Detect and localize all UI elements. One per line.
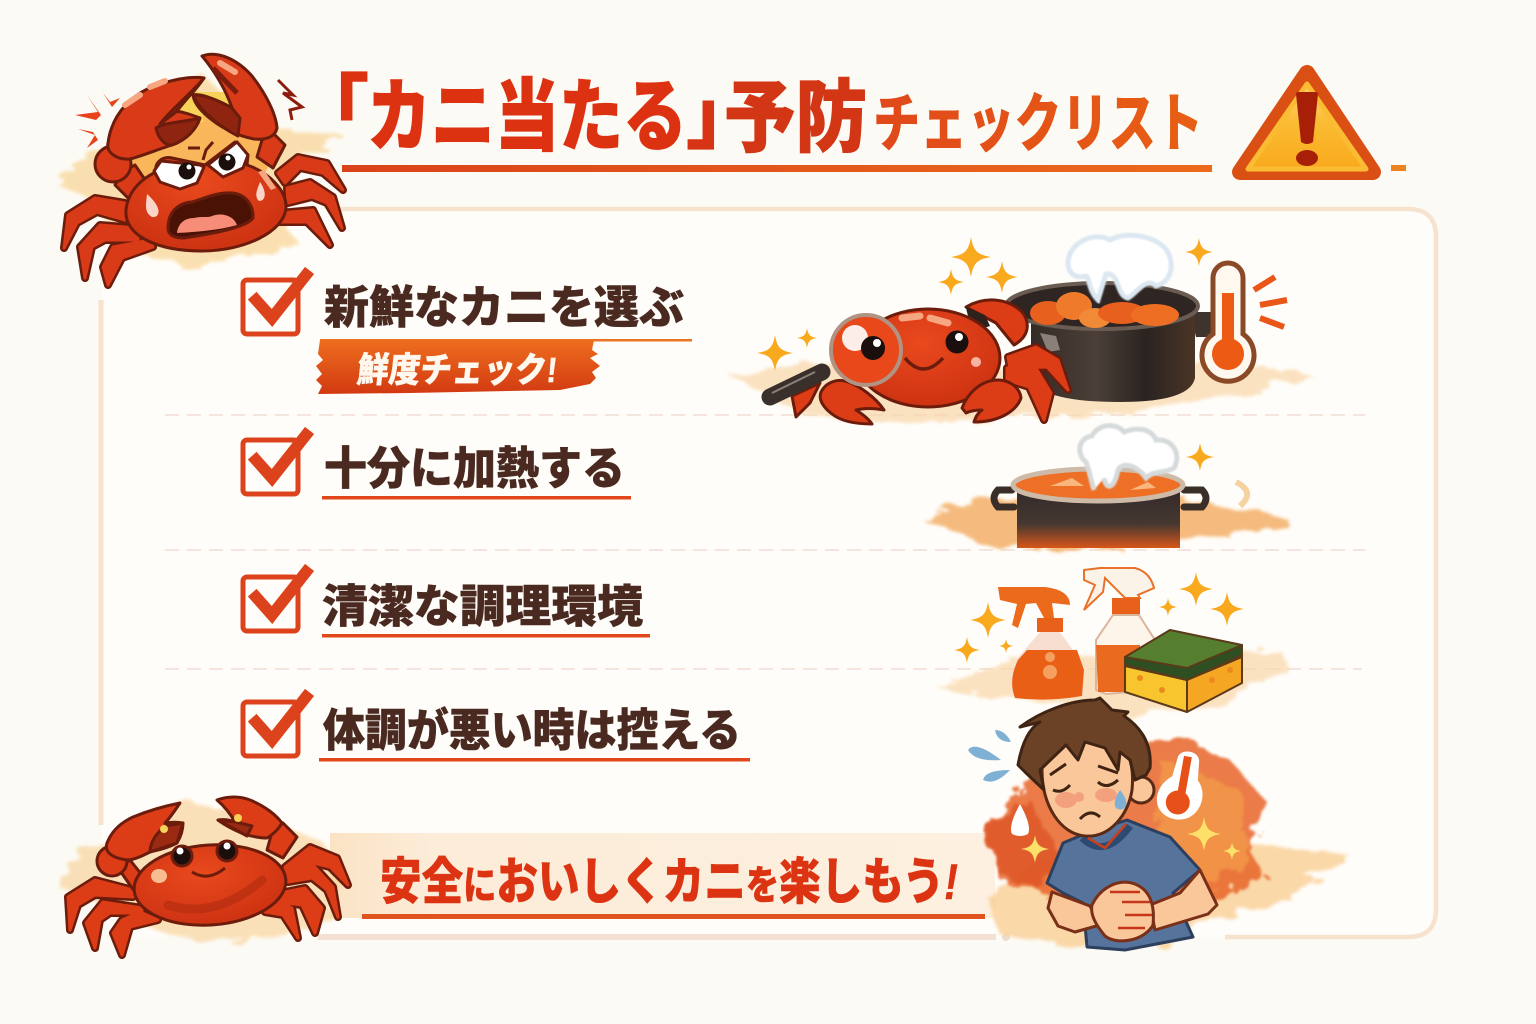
crab shell	[131, 840, 289, 930]
ears	[1128, 777, 1154, 803]
crab body	[856, 309, 1000, 407]
title: 「	[293, 69, 369, 154]
pot food	[1030, 292, 1179, 328]
title: チェックリスト	[873, 88, 1203, 160]
crab smile	[905, 358, 943, 369]
pot handles	[994, 490, 1206, 507]
row 3 underline	[322, 634, 650, 638]
face	[1042, 729, 1133, 836]
row 4 label: 体調が悪い時は控える	[323, 705, 741, 756]
crab claws	[108, 77, 204, 159]
crab claws	[106, 803, 183, 860]
pot rim	[1006, 283, 1198, 329]
checkbox 4	[243, 697, 306, 756]
pot rim	[1013, 469, 1183, 501]
crab cheek	[971, 357, 981, 367]
spray bottle white	[1084, 568, 1155, 694]
checkbox 3	[243, 572, 306, 631]
face backdrop	[118, 105, 280, 200]
crab eye	[946, 330, 968, 354]
band background	[330, 833, 995, 918]
row 3: clean kitchen	[243, 572, 650, 638]
steam	[1080, 426, 1177, 490]
icon: warning triangle	[1240, 73, 1373, 172]
title underline	[342, 165, 1212, 172]
arms and hands	[1048, 870, 1217, 941]
wash: bottom crab	[58, 800, 345, 945]
row 1: choose fresh crab	[243, 275, 692, 394]
crab arms	[97, 823, 297, 892]
panel: checklist card	[101, 209, 1436, 941]
sparkles	[954, 572, 1244, 663]
crab shell	[126, 142, 286, 251]
neck	[1088, 824, 1126, 848]
tear	[1115, 790, 1126, 810]
pot highlight	[1040, 333, 1060, 352]
crab tail	[792, 383, 820, 417]
title: 」	[686, 74, 762, 159]
title	[293, 69, 1203, 162]
sparkles: boy	[1021, 817, 1241, 863]
sparkle	[1186, 443, 1214, 471]
heat wisp	[1236, 482, 1247, 506]
crab highlight	[151, 869, 167, 883]
illustration: steam over first pot	[1068, 235, 1171, 300]
cheeks	[1055, 788, 1117, 808]
row 4 underline	[319, 758, 750, 762]
icon: fever thermometer	[1154, 748, 1210, 823]
sponge	[1125, 630, 1242, 712]
shirt	[1047, 820, 1200, 950]
icon: magnifying glass	[770, 315, 901, 397]
crab smile	[192, 868, 225, 876]
wash: cleaning supplies	[932, 650, 1290, 716]
icon: angry crab	[64, 54, 343, 285]
sweat drops	[146, 170, 276, 217]
shell highlights	[902, 316, 948, 323]
crab shell speckle	[168, 880, 262, 909]
icon: white drop	[1011, 804, 1029, 836]
illustration: boiling pot	[994, 426, 1247, 548]
row 2: cook thoroughly	[243, 435, 631, 500]
icon: blue sweat drops	[968, 730, 1011, 782]
closing message band	[330, 833, 995, 919]
icon: thermometer	[1202, 263, 1287, 381]
crab arms	[95, 133, 285, 200]
illustration: cleaning supplies	[954, 568, 1244, 712]
title: カニ当たる	[367, 72, 687, 161]
checkbox 1	[243, 275, 306, 334]
row 3 label: 清潔な調理環境	[322, 581, 643, 632]
icon: anger marks	[75, 80, 302, 148]
crab legs	[64, 157, 343, 285]
wash: boy background	[985, 735, 1350, 945]
illustration: sick boy	[1018, 698, 1217, 950]
row 2 label: 十分に加熱する	[324, 443, 625, 494]
icon: happy crab	[68, 797, 348, 955]
hair	[1018, 698, 1150, 790]
row 1 label: 新鮮なカニを選ぶ	[324, 282, 684, 333]
row 4: avoid when unwell	[243, 697, 750, 762]
crab eyes	[154, 142, 248, 189]
wash: crab and pot	[728, 360, 1316, 424]
pot body	[1031, 308, 1195, 402]
crab mouth	[168, 193, 253, 238]
sparkles: first illustration	[757, 237, 1213, 371]
watercolor wash: top crab	[55, 72, 345, 268]
band underline	[362, 914, 985, 919]
title: 予防	[724, 73, 867, 162]
row 1 underline	[320, 339, 692, 342]
wash: boiling pot	[920, 498, 1292, 550]
pot body	[1017, 488, 1180, 548]
pot handle	[1190, 312, 1216, 337]
spray bottle orange	[998, 587, 1084, 700]
freshness check banner	[316, 340, 600, 394]
soup highlight	[1050, 478, 1156, 490]
freshness check banner: 鮮度チェック!	[355, 351, 559, 390]
checkbox 2	[243, 435, 306, 494]
crab pincers	[820, 380, 884, 424]
illustration: cooking pot with thermometer	[1006, 283, 1216, 402]
crab walking legs	[1007, 347, 1068, 420]
claw highlights	[125, 63, 235, 105]
closing message: 安全においしくカニを楽しもう!	[380, 854, 958, 910]
crab top claw	[966, 300, 1027, 345]
icon: magnifier crab	[792, 300, 1068, 424]
row 2 underline	[322, 496, 631, 500]
crab eyes	[172, 846, 192, 866]
title underline end dash	[1391, 165, 1406, 171]
eyes and mouth	[1050, 764, 1118, 819]
crab legs	[68, 847, 348, 955]
